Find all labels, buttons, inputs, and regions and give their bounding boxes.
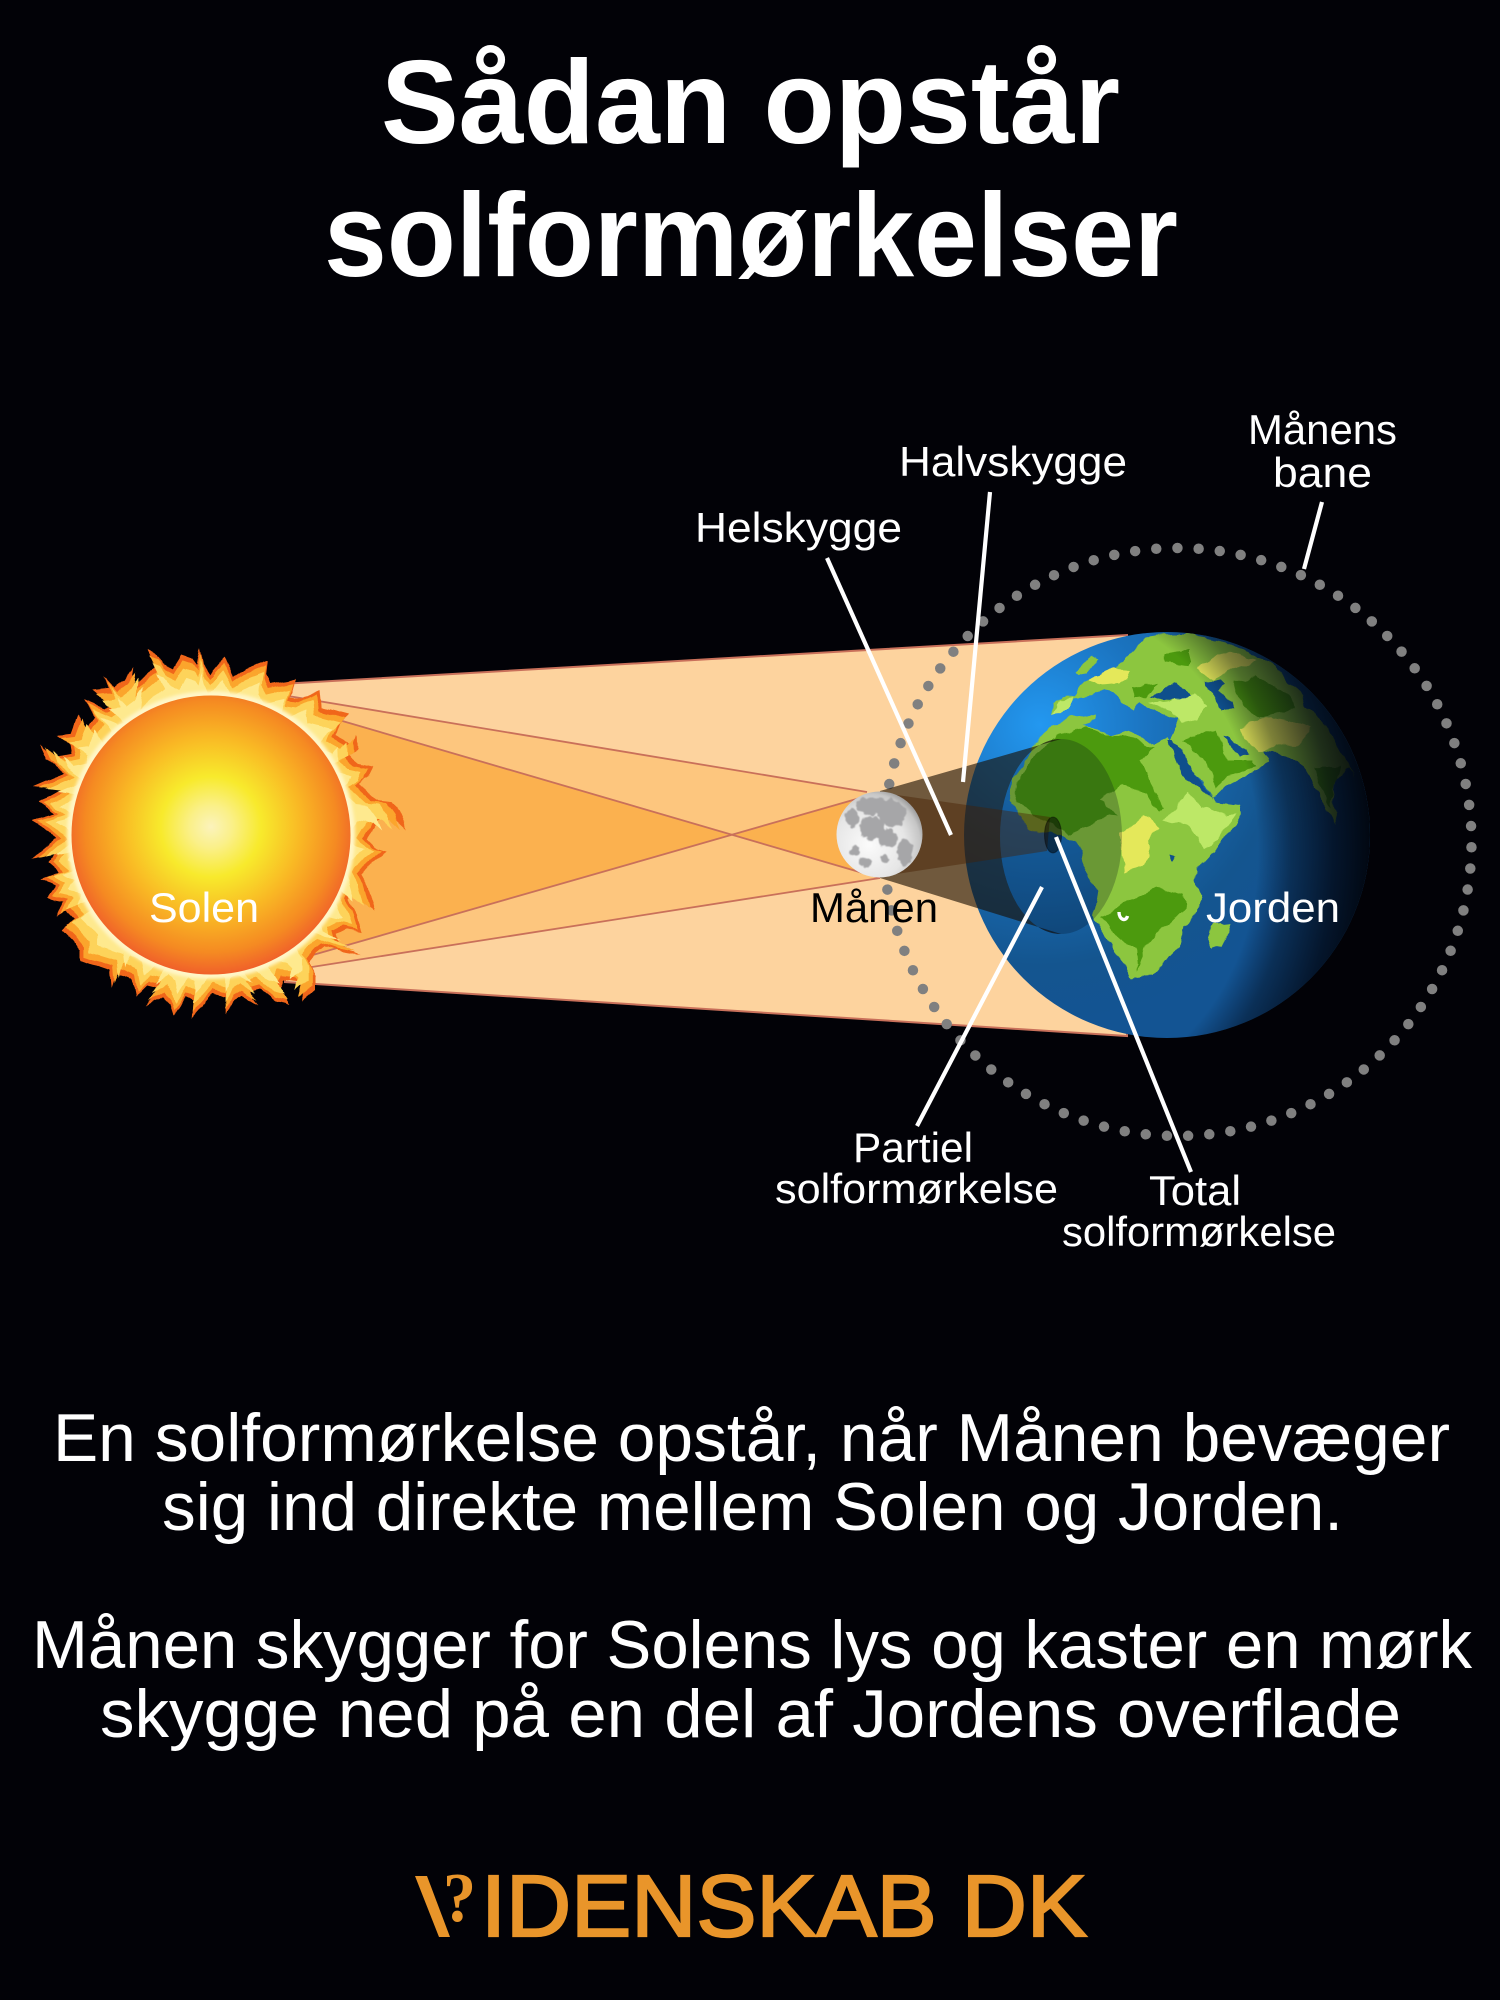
title: solformørkelser	[324, 169, 1178, 302]
light beams from the Sun	[250, 635, 1127, 1036]
Sun	[32, 647, 407, 1018]
label: Partiel solformørkelse	[775, 1124, 1058, 1212]
title: Sådan opstår	[381, 36, 1120, 169]
label: Total solformørkelse	[1062, 1167, 1336, 1255]
label: Partiel solformørkelse: Partiel	[853, 1124, 973, 1171]
penumbra ellipse on Earth	[1000, 739, 1122, 934]
Moon	[836, 792, 922, 878]
label: Total solformørkelse: Total	[1149, 1167, 1241, 1214]
leader: Partiel solformørkelse	[917, 887, 1042, 1126]
stray white letter fragment	[1119, 912, 1128, 919]
leader: Månens bane	[1304, 502, 1322, 569]
Earth	[964, 632, 1370, 1038]
explanatory text: skygge ned på en del af Jordens overflade	[100, 1676, 1401, 1752]
land masses	[1012, 635, 1353, 978]
umbra spot	[1044, 817, 1062, 853]
label: Månens bane: bane	[1273, 449, 1372, 496]
leader: Halvskygge	[963, 492, 990, 782]
label: Solen: Solen	[149, 884, 259, 931]
explanatory text: Månen skygger for Solens lys og kaster en mørk	[32, 1607, 1473, 1683]
label: Total solformørkelse: solformørkelse	[1062, 1208, 1336, 1255]
eclipse shadow	[880, 739, 1122, 934]
leader: Total solformørkelse	[1056, 837, 1191, 1172]
leader: Helskygge	[827, 558, 951, 835]
leader lines	[827, 492, 1322, 1172]
label: Månens bane	[1248, 406, 1397, 496]
penumbra cone	[880, 739, 1061, 934]
Moon orbit	[884, 548, 1472, 1136]
title	[324, 36, 1178, 302]
explanatory text	[32, 1400, 1473, 1752]
diagram labels	[149, 406, 1397, 1255]
logo: IDENSKAB DK	[481, 1858, 1087, 1955]
label: Halvskygge: Halvskygge	[899, 438, 1127, 485]
explanatory text: sig ind direkte mellem Solen og Jorden.	[162, 1469, 1343, 1545]
explanatory text: En solformørkelse opstår, når Månen bevæger	[53, 1400, 1450, 1476]
label: Månens bane: Månens	[1248, 406, 1397, 453]
logo: ?	[443, 1860, 476, 1937]
label: Partiel solformørkelse: solformørkelse	[775, 1165, 1058, 1212]
label: Jorden: Jorden	[1206, 884, 1340, 931]
label: Helskygge: Helskygge	[695, 504, 902, 551]
label: Månen: Månen	[810, 884, 938, 931]
umbra cone	[890, 794, 1050, 875]
